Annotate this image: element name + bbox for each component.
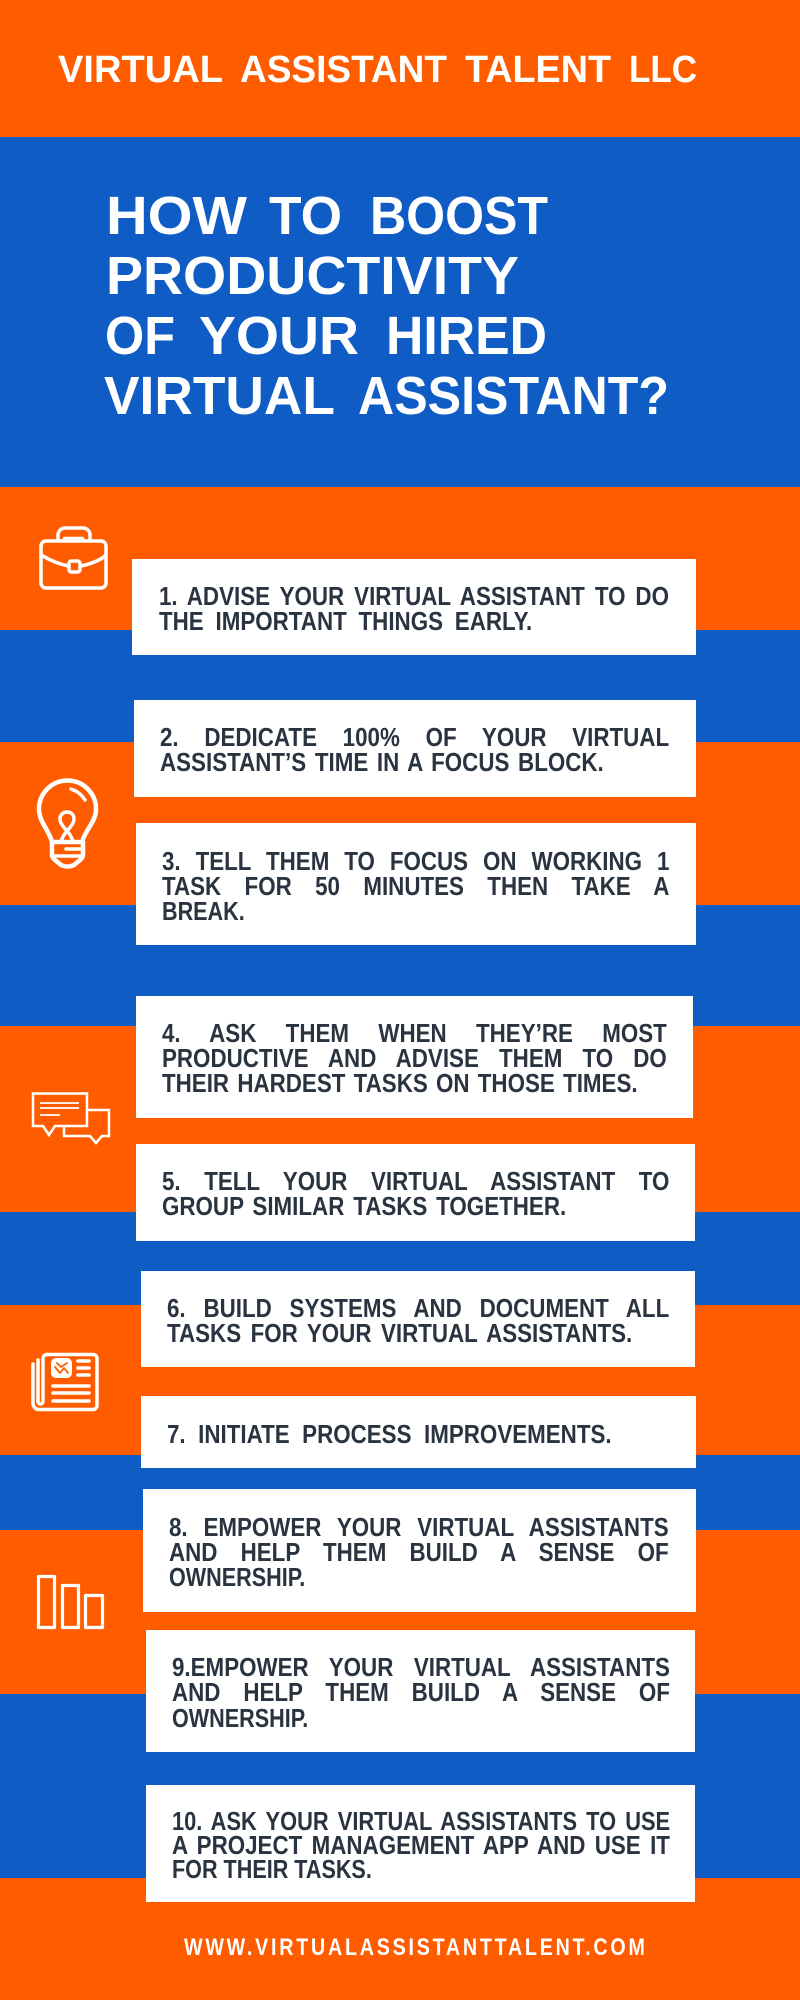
footer band (0, 1878, 800, 2000)
stripe: orange 5 (0, 1530, 800, 1694)
main title: PRODUCTIVITY (106, 246, 519, 306)
card 9: AND HELP THEM BUILD A SENSE OF (172, 1677, 670, 1707)
stripe: blue 4 (0, 1455, 800, 1530)
card 7: 7. INITIATE PROCESS IMPROVEMENTS. (167, 1419, 612, 1449)
main title: ASSISTANT? (358, 366, 669, 426)
card 4: PRODUCTIVE AND ADVISE THEM TO DO (162, 1043, 667, 1073)
card 1 (132, 559, 696, 655)
card 8: 8. EMPOWER YOUR VIRTUAL ASSISTANTS (169, 1512, 669, 1542)
card 9: 9.EMPOWER YOUR VIRTUAL ASSISTANTS (172, 1652, 670, 1682)
card 2 (134, 700, 696, 797)
card 5 (136, 1144, 695, 1241)
main title: YOUR (199, 306, 359, 366)
card 2: 2. DEDICATE 100% OF YOUR VIRTUAL (160, 722, 669, 752)
card 9: OWNERSHIP. (172, 1703, 308, 1733)
card 1: 1. ADVISE YOUR VIRTUAL ASSISTANT TO DO (159, 581, 669, 611)
card 6 (141, 1271, 695, 1367)
card 1: THE IMPORTANT THINGS EARLY. (159, 606, 532, 636)
company name heading (58, 49, 697, 91)
card 4: THEIR HARDEST TASKS ON THOSE TIMES. (162, 1068, 638, 1098)
card 5: GROUP SIMILAR TASKS TOGETHER. (162, 1191, 566, 1221)
main title: TO (269, 186, 342, 246)
main title: BOOST (370, 186, 548, 246)
stripe: orange 3 (0, 1026, 800, 1212)
card 7 (141, 1396, 696, 1468)
card 6: TASKS FOR YOUR VIRTUAL ASSISTANTS. (167, 1318, 632, 1348)
stripe: blue 3 (0, 1212, 800, 1305)
card 8 (143, 1489, 696, 1612)
footer website: WWW.VIRTUALASSISTANTTALENT.COM (184, 1933, 645, 1960)
header band (0, 0, 800, 137)
main title: OF (105, 306, 175, 366)
icon: newspaper (31, 1352, 99, 1412)
card 4 (136, 996, 693, 1118)
stripe: blue 2 (0, 905, 800, 1026)
icon: light bulb (36, 778, 98, 869)
card 10: FOR THEIR TASKS. (172, 1854, 372, 1884)
card 3: TASK FOR 50 MINUTES THEN TAKE A (162, 871, 669, 901)
card 10 (146, 1785, 695, 1902)
card 8: AND HELP THEM BUILD A SENSE OF (169, 1537, 669, 1567)
card 2: ASSISTANT’S TIME IN A FOCUS BLOCK. (160, 747, 604, 777)
icon: briefcase (39, 526, 108, 590)
icon: bar chart (36, 1574, 104, 1630)
stripe: orange 1 (0, 487, 800, 630)
company name heading: ASSISTANT (240, 49, 447, 91)
card 3 (136, 823, 696, 945)
card 3: BREAK. (162, 896, 245, 926)
stripe: orange 2 (0, 742, 800, 905)
card 5: 5. TELL YOUR VIRTUAL ASSISTANT TO (162, 1166, 669, 1196)
stripe: blue 5 (0, 1694, 800, 1878)
card 8: OWNERSHIP. (169, 1562, 305, 1592)
main title (104, 186, 669, 426)
card 10: A PROJECT MANAGEMENT APP AND USE IT (172, 1830, 670, 1860)
title band (0, 137, 800, 487)
stripe: orange 4 (0, 1305, 800, 1455)
company name heading: VIRTUAL (58, 49, 223, 91)
main title: HOW (106, 186, 247, 246)
card 3: 3. TELL THEM TO FOCUS ON WORKING 1 (162, 846, 669, 876)
card 9 (146, 1630, 695, 1752)
card 6: 6. BUILD SYSTEMS AND DOCUMENT ALL (167, 1293, 669, 1323)
main title: VIRTUAL (104, 366, 335, 426)
company name heading: TALENT (465, 49, 611, 91)
stripe: blue 1 (0, 630, 800, 742)
card 4: 4. ASK THEM WHEN THEY’RE MOST (162, 1018, 667, 1048)
icon: chat bubbles (32, 1092, 110, 1145)
card 10: 10. ASK YOUR VIRTUAL ASSISTANTS TO USE (172, 1806, 670, 1836)
company name heading: LLC (629, 49, 697, 91)
main title: HIRED (386, 306, 547, 366)
